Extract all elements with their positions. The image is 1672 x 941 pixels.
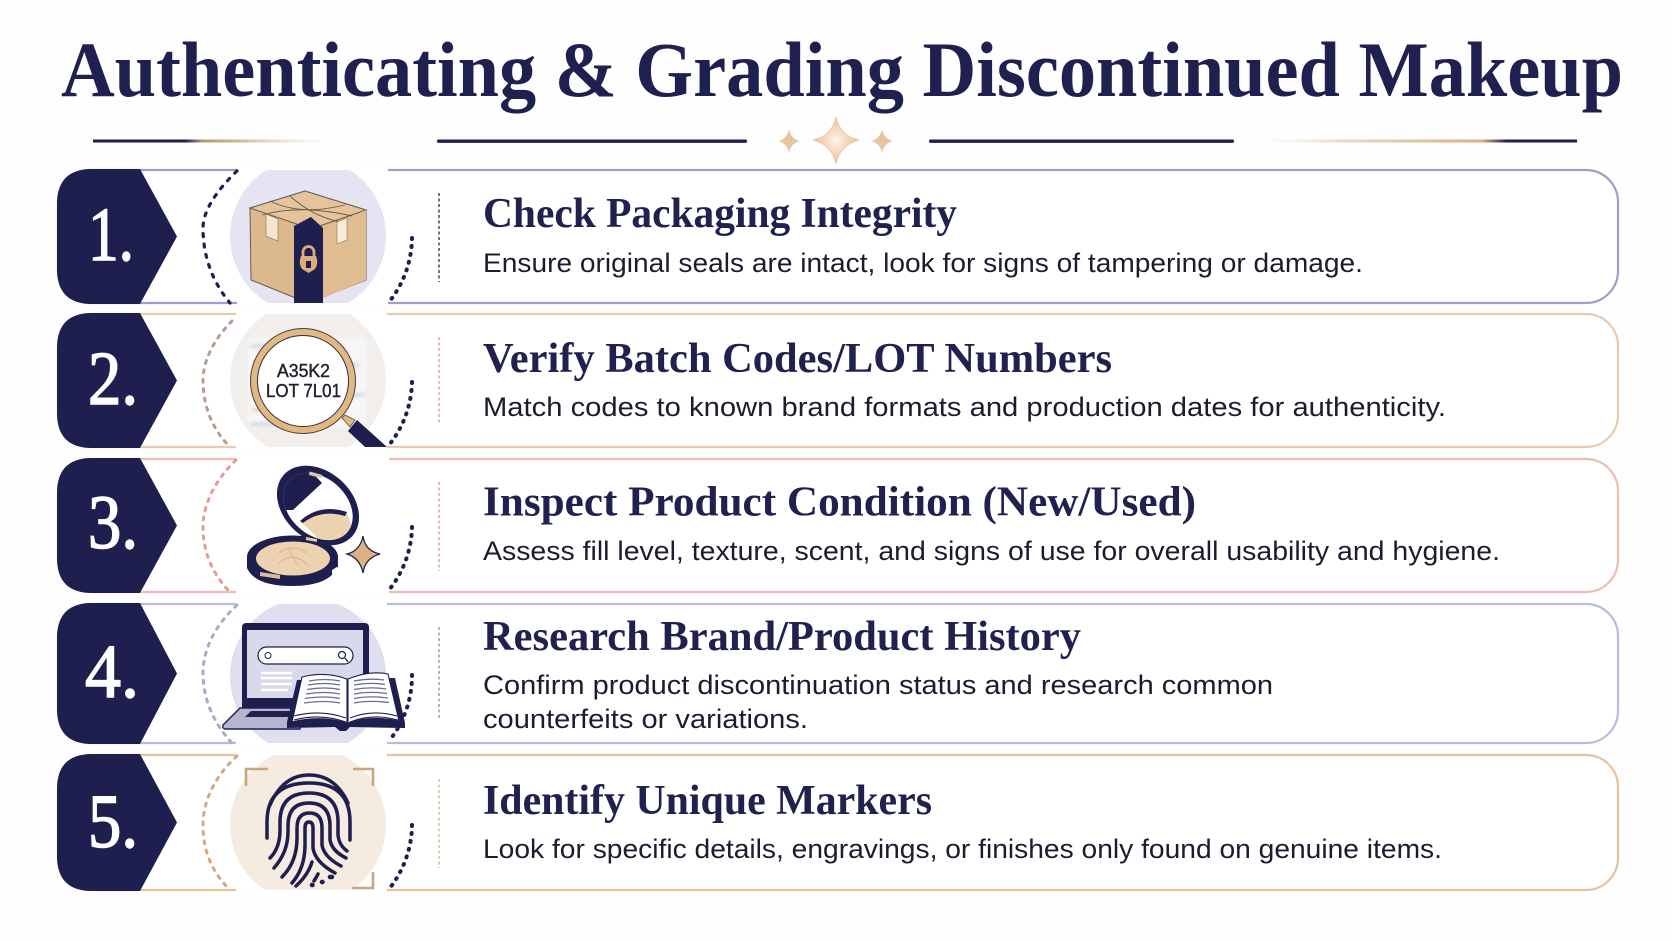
body 4: Confirm product discontinuation status and research common xyxy=(483,670,1273,700)
icon: laptop and book xyxy=(222,604,405,743)
number badge 3 xyxy=(57,458,177,593)
body 5: Look for specific details, engravings, or finishes only found on genuine items. xyxy=(483,834,1442,864)
number badge 2 xyxy=(57,313,177,448)
code text xyxy=(267,364,340,398)
number badge 1: 1. xyxy=(88,193,134,277)
number badge 5 xyxy=(57,754,177,891)
code text: A35K2 xyxy=(277,361,330,381)
heading 1: Check Packaging Integrity xyxy=(483,191,957,237)
panel: step 2 verify batch codes xyxy=(56,312,1620,448)
dashed separator 5 xyxy=(438,779,440,868)
heading 5: Identify Unique Markers xyxy=(483,778,932,824)
dotted arcs 5 xyxy=(203,756,412,890)
icon: magnifier over lot code xyxy=(230,314,387,447)
title divider with sparkles xyxy=(93,117,1577,164)
dashed separator 1 xyxy=(438,193,440,282)
icon: sealed box xyxy=(230,170,386,303)
title: Authenticating & Grading Discontinued Makeup xyxy=(61,26,1623,113)
heading 2: Verify Batch Codes/LOT Numbers xyxy=(483,336,1112,382)
number badge 3: 3. xyxy=(88,481,138,565)
dashed separator 4 xyxy=(438,627,440,719)
icon: fingerprint xyxy=(230,755,386,890)
number badge 5: 5. xyxy=(88,780,138,864)
panel: step 3 inspect condition xyxy=(57,449,1618,595)
panel: step 5 identify markers xyxy=(56,754,1620,892)
code text: LOT 7L01 xyxy=(266,381,341,401)
icon: compact with sparkle xyxy=(247,466,380,586)
heading 4: Research Brand/Product History xyxy=(483,614,1081,660)
dashed separator 3 xyxy=(438,482,440,571)
dotted arcs 2 xyxy=(203,321,412,447)
dotted arcs 3 xyxy=(203,460,412,592)
panel: step 4 research history xyxy=(57,598,1618,754)
dotted arcs 4 xyxy=(203,605,412,743)
number badge 2: 2. xyxy=(88,337,138,421)
body 3: Assess fill level, texture, scent, and signs of use for overall usability and hygiene. xyxy=(483,536,1500,566)
sparkle xyxy=(347,536,380,573)
body 2: Match codes to known brand formats and production dates for authenticity. xyxy=(483,392,1446,422)
number badge 1 xyxy=(57,169,177,304)
open book xyxy=(287,673,405,731)
number badge 4: 4. xyxy=(85,630,139,714)
number badge 4 xyxy=(57,603,177,744)
dotted arcs 1 xyxy=(203,171,412,303)
panel: step 1 check packaging xyxy=(56,168,1620,305)
heading 3: Inspect Product Condition (New/Used) xyxy=(483,480,1196,526)
dashed separator 2 xyxy=(438,337,440,425)
body 1: Ensure original seals are intact, look for signs of tampering or damage. xyxy=(483,248,1363,278)
body 4 second line: counterfeits or variations. xyxy=(483,704,808,734)
